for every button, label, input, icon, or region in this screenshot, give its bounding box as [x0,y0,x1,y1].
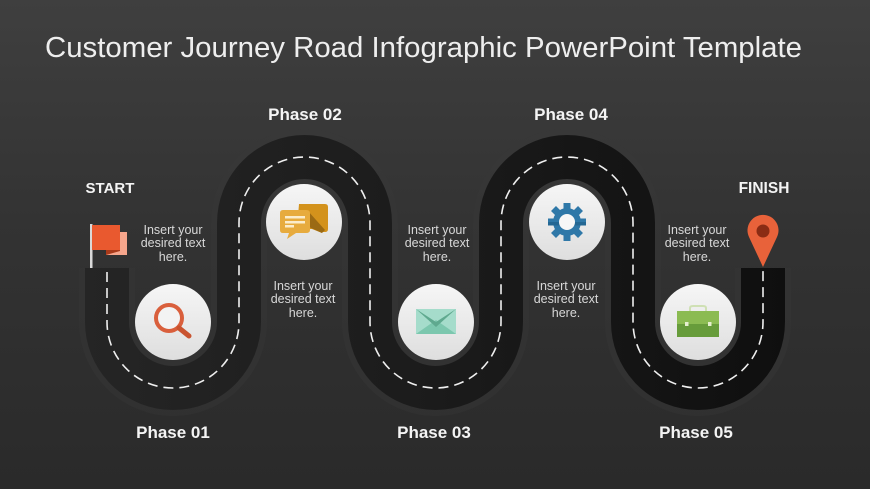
icon: phase 02 chat bubbles [266,184,342,260]
road halo [107,157,763,388]
text block: phase 02: here. [289,306,317,320]
road centre dashes [107,157,763,388]
text block: phase 01: desired text [141,236,206,250]
label: phase 05: Phase 05 [659,423,733,442]
label: phase 03: Phase 03 [397,423,471,442]
label: phase 04: Phase 04 [534,105,608,124]
text block: phase 01: Insert your [143,223,203,237]
icon: phase 01 magnifier [135,284,211,360]
text block: phase 05: here. [683,250,711,264]
icon: finish map pin [748,215,778,267]
icon: phase 03 envelope [398,284,474,360]
text block: phase 01: here. [159,250,187,264]
icon: phase 04 gear [529,184,605,260]
label: phase 02: Phase 02 [268,105,342,124]
label: phase 01: Phase 01 [136,423,210,442]
text block: phase 03: desired text [405,236,470,250]
icon: phase 05 briefcase [660,284,736,360]
winding road [107,157,763,388]
text block: phase 04: desired text [534,292,599,306]
icon: start flag [90,224,127,268]
text block: phase 03: here. [423,250,451,264]
text block: phase 05: desired text [665,236,730,250]
label: finish: FINISH [739,180,789,197]
text block: phase 03: Insert your [407,223,467,237]
text block: phase 04: here. [552,306,580,320]
text block: phase 02: Insert your [273,279,333,293]
text block: phase 05: Insert your [667,223,727,237]
title: Customer Journey Road Infographic PowerPoint Template [45,32,802,64]
label: start: START [86,180,134,197]
text block: phase 04: Insert your [536,279,596,293]
text block: phase 02: desired text [271,292,336,306]
